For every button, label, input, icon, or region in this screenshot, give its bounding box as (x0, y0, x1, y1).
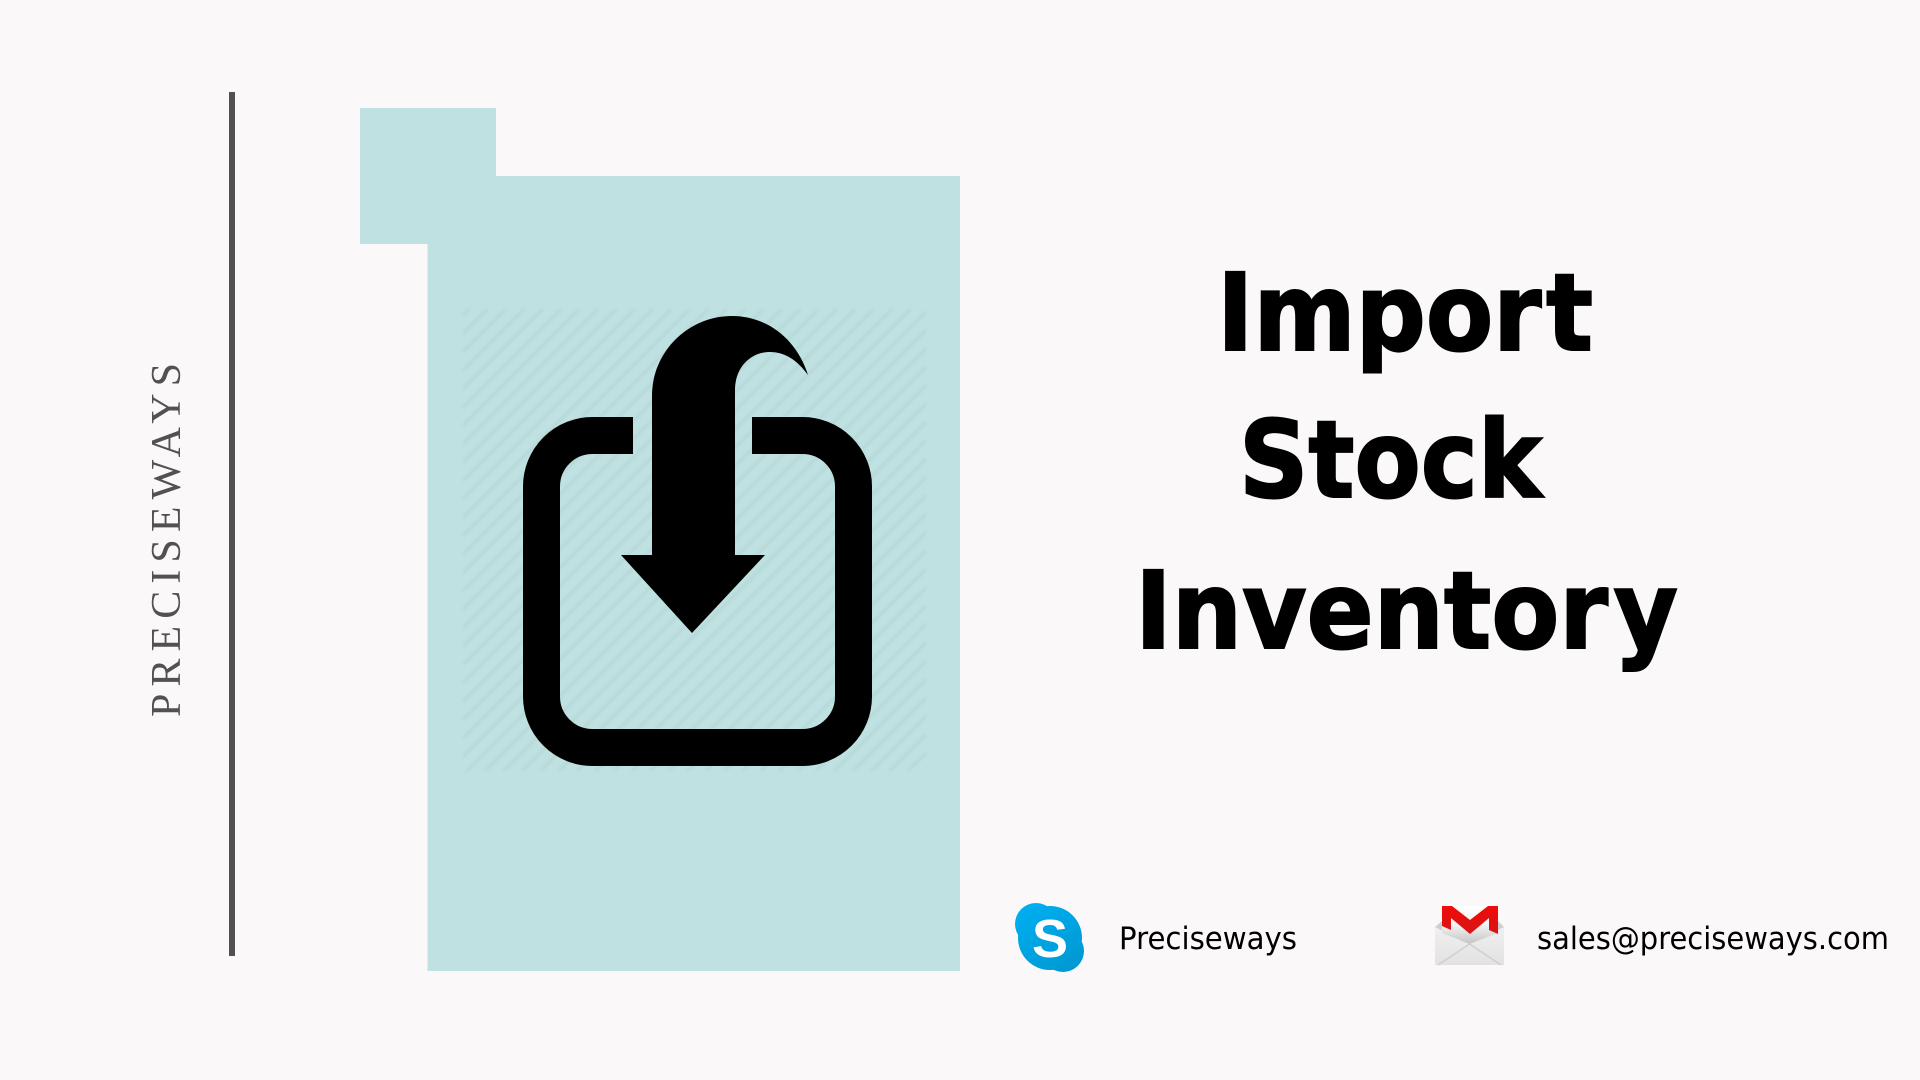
contact: skype name: Preciseways (1119, 921, 1297, 957)
title line: Inventory: Inventory (1135, 550, 1678, 674)
icon: gmail envelope (1435, 899, 1504, 965)
panel main block (428, 176, 960, 971)
panel corner square (360, 108, 496, 244)
title line: Stock: Stock (1239, 399, 1545, 523)
contact: email: sales@preciseways.com (1537, 921, 1889, 957)
title (1135, 252, 1678, 674)
icon: skype (1015, 903, 1084, 972)
vertical divider bar (229, 92, 235, 956)
tray outline (542, 436, 854, 748)
curved down arrow (621, 316, 808, 633)
hatched square behind icon (463, 309, 926, 771)
title line: Import: Import (1217, 252, 1593, 376)
panel: teal backdrop (360, 108, 960, 971)
brand label text: PRECISEWAYS (144, 363, 190, 717)
icon: skype: S (1032, 909, 1068, 969)
icon: import arrow into tray (542, 316, 854, 748)
